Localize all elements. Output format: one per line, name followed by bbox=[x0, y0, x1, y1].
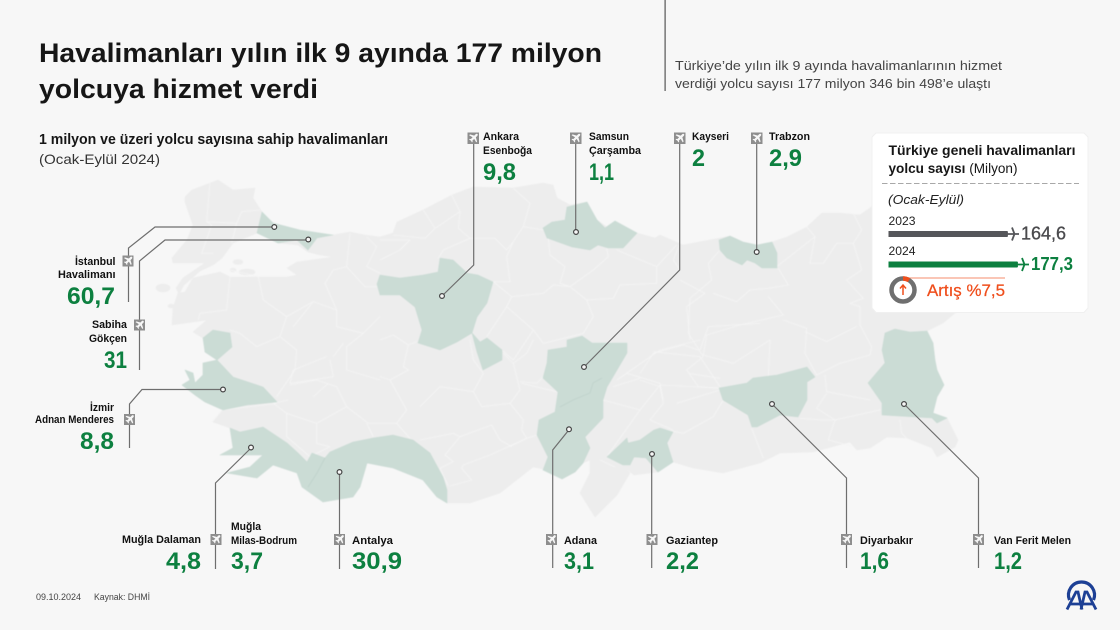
airport: Kayseri bbox=[582, 131, 729, 369]
airport: Adana: 3,1 bbox=[564, 548, 594, 575]
footer: date and source bbox=[36, 592, 150, 602]
airport: Sabiha Gökçen bbox=[89, 237, 311, 374]
title: Havalimanları yılın ilk 9 ayında 177 milyon bbox=[39, 38, 602, 68]
airport: Samsun Çarşamba: Samsun bbox=[589, 131, 629, 143]
province: Diyarbakir bbox=[719, 367, 815, 427]
panel: national passenger totals bbox=[872, 133, 1088, 312]
subtitle bbox=[39, 132, 388, 167]
province: Istanbul bbox=[257, 212, 333, 250]
province: Ankara bbox=[377, 258, 493, 350]
airport: Gaziantep bbox=[646, 452, 718, 575]
province: Van bbox=[868, 329, 947, 423]
bar 2023: 164,6 bbox=[1021, 224, 1066, 244]
airport: Adana: Adana bbox=[564, 535, 598, 547]
airport: Diyarbakır: 1,6 bbox=[860, 548, 889, 575]
airport: Kayseri: Kayseri bbox=[692, 131, 729, 143]
airport: Ankara Esenboğa: Esenboğa bbox=[483, 145, 533, 157]
panel heading bbox=[888, 143, 1076, 176]
province: Balikesir area bbox=[203, 330, 232, 360]
subtitle: 1 milyon ve üzeri yolcu sayısına sahip havalimanları bbox=[39, 132, 388, 148]
title bbox=[39, 38, 602, 104]
province: Samsun bbox=[543, 202, 637, 250]
panel heading: Türkiye geneli havalimanları bbox=[888, 143, 1076, 158]
airport: Antalya bbox=[334, 470, 402, 575]
bar 2023 bbox=[888, 214, 1066, 244]
province: Kayseri and Adana bbox=[537, 336, 627, 479]
airport: Antalya: Antalya bbox=[352, 535, 394, 547]
airport: İzmir Adnan Menderes bbox=[35, 387, 225, 455]
airport: İstanbul Havalimanı: İstanbul bbox=[75, 255, 116, 268]
airport: Kayseri: 2 bbox=[692, 145, 705, 172]
airport: Muğla Milas-Bodrum: Muğla bbox=[231, 521, 262, 533]
highlighted provinces bbox=[182, 202, 947, 503]
logo: Anadolu Agency bbox=[1067, 582, 1096, 610]
footer: date and source: Kaynak: DHMİ bbox=[94, 592, 150, 602]
airport: İzmir Adnan Menderes: Adnan Menderes bbox=[35, 414, 114, 426]
airport: Gaziantep: Gaziantep bbox=[666, 535, 718, 547]
airport: Diyarbakır: Diyarbakır bbox=[860, 535, 914, 547]
airport: Antalya: 30,9 bbox=[352, 548, 402, 575]
airport: Ankara Esenboğa: 9,8 bbox=[483, 159, 516, 186]
airport: Muğla Dalaman bbox=[122, 445, 253, 575]
airport: Samsun Çarşamba: 1,1 bbox=[589, 159, 614, 186]
map of Turkey bbox=[156, 180, 1000, 517]
summary text bbox=[664, 0, 1003, 91]
province: Izmir bbox=[182, 360, 277, 410]
airport: Muğla Milas-Bodrum: 3,7 bbox=[231, 548, 263, 575]
province: Gaziantep bbox=[607, 428, 673, 472]
airport: Muğla Dalaman: 4,8 bbox=[166, 548, 201, 575]
airport: Samsun Çarşamba: Çarşamba bbox=[589, 145, 642, 157]
airport: Muğla Milas-Bodrum bbox=[231, 521, 297, 575]
province: Kırşehir area bbox=[472, 333, 502, 370]
airport: Sabiha Gökçen: Sabiha bbox=[92, 319, 128, 331]
airport: Van Ferit Melen: 1,2 bbox=[994, 548, 1022, 575]
increase indicator bbox=[892, 278, 1005, 302]
airport: Ankara Esenboğa bbox=[440, 131, 533, 298]
airport: Samsun Çarşamba bbox=[570, 131, 642, 234]
airport: Sabiha Gökçen: Gökçen bbox=[89, 333, 127, 345]
bar 2023: 2023 bbox=[888, 214, 916, 228]
airport: Muğla Milas-Bodrum: Milas-Bodrum bbox=[231, 535, 297, 547]
subtitle: (Ocak-Eylül 2024) bbox=[39, 151, 160, 167]
airport: İzmir Adnan Menderes: İzmir bbox=[90, 401, 115, 414]
summary text: Türkiye’de yılın ilk 9 ayında havalimanlarının hizmet bbox=[675, 59, 1003, 73]
bar 2024: 2024 bbox=[888, 244, 916, 258]
airport: Muğla Dalaman: Muğla Dalaman bbox=[122, 534, 201, 546]
province borders bbox=[198, 182, 907, 486]
airport: Adana bbox=[546, 427, 598, 575]
airport: İzmir Adnan Menderes: 8,8 bbox=[80, 428, 114, 455]
airport: Ankara Esenboğa: Ankara bbox=[483, 131, 520, 143]
airport: Trabzon: Trabzon bbox=[769, 131, 810, 143]
airport: Gaziantep: 2,2 bbox=[666, 548, 699, 575]
bar 2024: 177,3 bbox=[1031, 254, 1073, 274]
province: Trabzon bbox=[719, 236, 777, 268]
airport: İstanbul Havalimanı: 60,7 bbox=[67, 283, 115, 310]
airport: Van Ferit Melen bbox=[902, 402, 1071, 575]
airport: İstanbul Havalimanı: Havalimanı bbox=[58, 269, 116, 281]
summary text: verdiği yolcu sayısı 177 milyon 346 bin 498’e ulaştı bbox=[675, 77, 991, 91]
bar 2024 bbox=[888, 244, 1073, 274]
airport: Trabzon bbox=[751, 131, 810, 254]
airport: Diyarbakır bbox=[770, 402, 914, 575]
airport: İstanbul Havalimanı bbox=[58, 225, 277, 310]
period: (Ocak-Eylül) bbox=[888, 193, 964, 207]
panel heading: yolcu sayısı (Milyon) bbox=[888, 161, 1018, 176]
airport: Sabiha Gökçen: 31 bbox=[104, 347, 127, 374]
footer: date and source: 09.10.2024 bbox=[36, 592, 81, 602]
title: yolcuya hizmet verdi bbox=[39, 74, 318, 104]
land bbox=[156, 180, 1000, 517]
province: Mugla and Antalya bbox=[220, 427, 447, 503]
airport: Trabzon: 2,9 bbox=[769, 145, 802, 172]
increase indicator: Artış %7,5 bbox=[927, 281, 1005, 300]
airport: Van Ferit Melen: Van Ferit Melen bbox=[994, 535, 1071, 547]
